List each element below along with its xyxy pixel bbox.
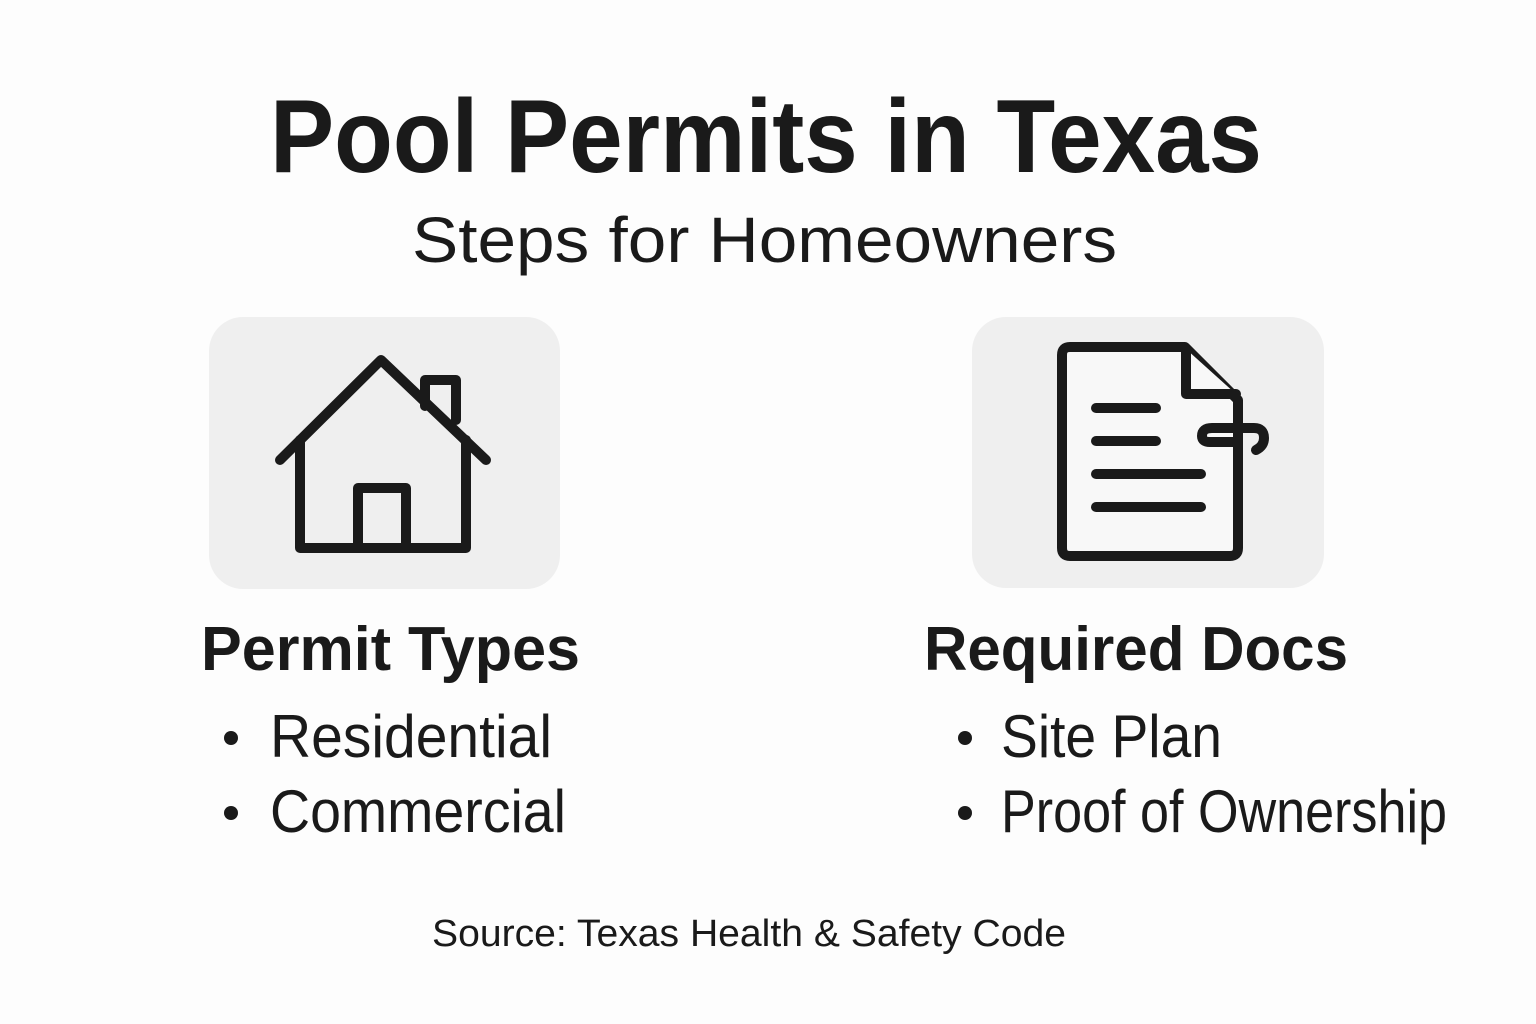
heading: required docs: Required Docs xyxy=(924,615,1348,684)
source: Source: Texas Health & Safety Code xyxy=(432,913,1066,955)
heading: permit types: Permit Types xyxy=(201,615,580,684)
list: required docs: Proof of Ownership xyxy=(1001,778,1447,845)
list: required docs xyxy=(958,703,1447,845)
subtitle: Steps for Homeowners xyxy=(412,204,1117,276)
panel: required docs icon xyxy=(972,317,1324,588)
list: permit types: Commercial xyxy=(270,778,566,845)
title: Pool Permits in Texas xyxy=(270,79,1262,195)
icon: house xyxy=(280,360,486,548)
panel: permit types icon xyxy=(209,317,560,589)
list: permit types: Residential xyxy=(270,703,552,770)
list: permit types xyxy=(224,703,566,845)
list: required docs: Site Plan xyxy=(1001,703,1222,770)
icon: document xyxy=(1062,347,1264,556)
